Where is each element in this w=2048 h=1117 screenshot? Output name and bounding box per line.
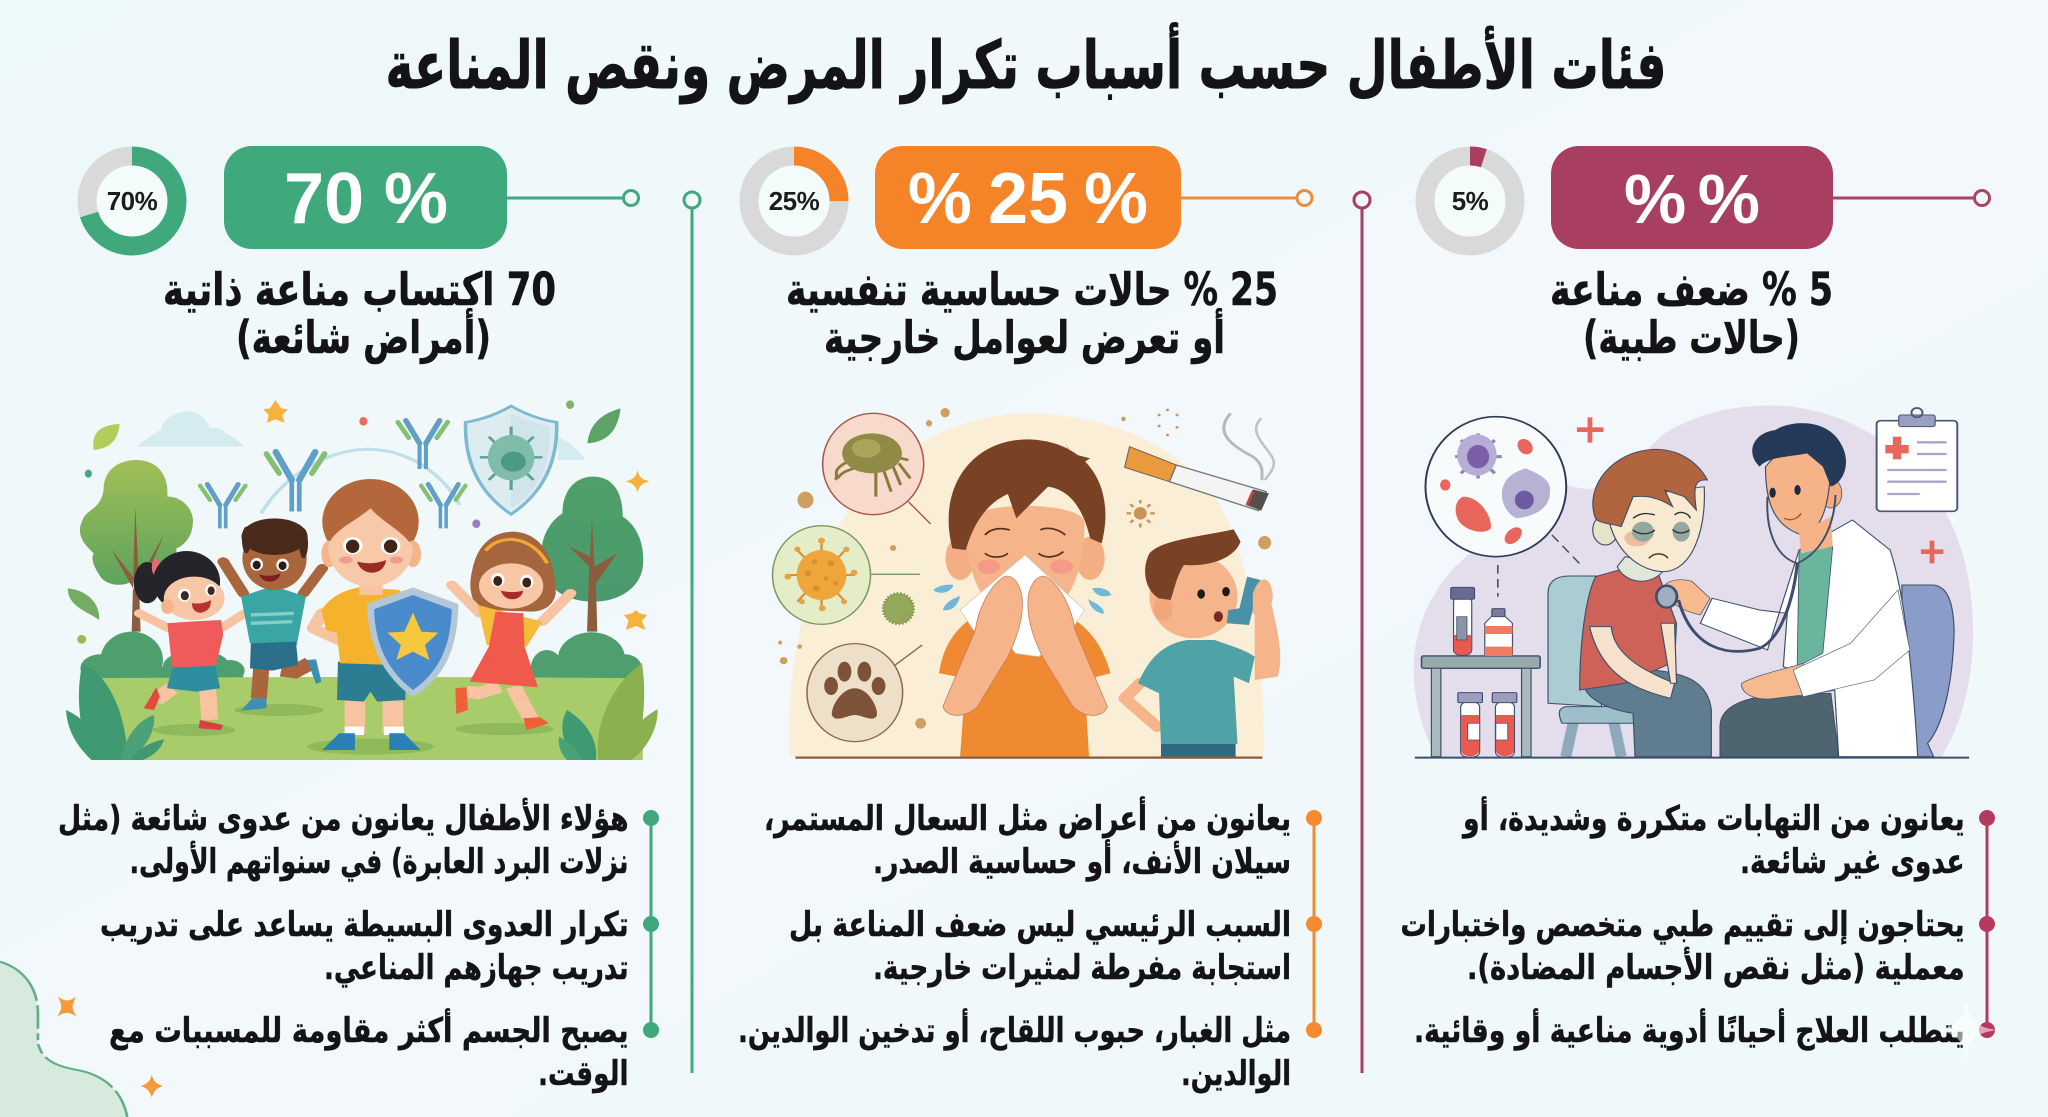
text block: هؤلاء الأطفال يعانون من عدوى شائعة (مثل: [58, 797, 629, 839]
panel: respiratory allergy 25%: [738, 146, 1370, 1094]
antibodies: [200, 421, 465, 528]
bushes: [80, 632, 642, 688]
donut chart 70%: [87, 156, 177, 246]
grass: [87, 677, 643, 760]
sneezing boy: [933, 439, 1111, 757]
blood cell magnifier: [1425, 417, 1581, 597]
percentage pill 25: % 25 %: [908, 159, 1148, 239]
donut chart 5%: [1425, 156, 1515, 246]
illustration: happy children with shields: [66, 400, 658, 760]
stethoscope: [1656, 495, 1836, 651]
percentage pill: [1551, 146, 1833, 249]
percentage pill: % %: [1624, 160, 1760, 238]
child: big boy with shield: [313, 479, 458, 750]
percentage pill 70: 70 %: [284, 159, 448, 239]
text block: تكرار العدوى البسيطة يساعد على تدريب: [100, 905, 629, 945]
text block: الوالدين.: [1181, 1054, 1291, 1094]
pollen: [883, 593, 914, 624]
vertical divider: [1354, 192, 1370, 1073]
bullet timeline: [1306, 810, 1322, 1038]
virus shield: [466, 406, 557, 514]
doctor: [1663, 423, 1918, 757]
donut chart 25%: 25%: [769, 186, 820, 216]
sick boy: [1580, 449, 1711, 757]
arc: [261, 449, 460, 513]
text block: استجابة مفرطة لمثيرات خارجية.: [873, 948, 1291, 988]
virus circle: [773, 526, 920, 624]
heading: [786, 263, 1278, 364]
donut chart 25%: [749, 156, 839, 246]
mite circle: [823, 413, 931, 524]
percentage pill 70: [224, 146, 507, 249]
panel: acquired immunity 70%: [58, 146, 700, 1094]
cream arch: [789, 413, 1264, 757]
heading: 25 % حالات حساسية تنفسية: [786, 263, 1278, 316]
text block: عدوى غير شائعة.: [1740, 842, 1965, 882]
child: girl in red shirt: [134, 551, 250, 730]
text block: نزلات البرد العابرة) في سنواتهم الأولى.: [130, 840, 628, 882]
percentage pill 25: [875, 146, 1181, 249]
heading: [1550, 263, 1833, 364]
right tree: [541, 477, 643, 602]
clipboard: [1877, 408, 1957, 511]
text block: سيلان الأنف، أو حساسية الصدر.: [873, 839, 1291, 882]
heading: 70 اكتساب مناعة ذاتية: [163, 263, 556, 316]
illustration: allergy triggers, sneezing boy and inhaler: [773, 408, 1280, 758]
heading: أو تعرض لعوامل خارجية: [824, 308, 1225, 364]
lavender background: [1414, 406, 1973, 757]
text block: الوقت.: [538, 1054, 629, 1094]
paw circle: [807, 644, 922, 742]
decorative corner blob: [0, 962, 163, 1117]
floor line: [795, 754, 1262, 761]
plus signs: [1577, 417, 1943, 563]
connector: [507, 190, 638, 206]
text block: [738, 796, 1291, 1094]
illustration: doctor examining child: [1414, 406, 1973, 758]
heading: [163, 263, 556, 364]
table with tubes and bottle: [1422, 587, 1540, 757]
vertical divider: [684, 192, 700, 1073]
heading: 5 % ضعف مناعة: [1550, 263, 1833, 316]
heading: (أمراض شائعة): [236, 308, 491, 364]
small decorations: stars, leaves and dots: [68, 400, 650, 644]
panel: weak immunity 5%: [1400, 146, 1997, 1060]
text block: يعانون من أعراض مثل السعال المستمر،: [764, 796, 1291, 839]
bullet timeline: [643, 810, 659, 1038]
child: girl in red dress: [452, 532, 570, 730]
donut chart 70%: 70%: [107, 186, 158, 216]
text block: يصبح الجسم أكثر مقاومة للمسببات مع: [109, 1008, 629, 1051]
floating dust: [778, 408, 1271, 729]
connector: [1181, 190, 1312, 206]
patient chair: [1548, 576, 1681, 757]
donut chart 5%: 5%: [1452, 186, 1489, 216]
bullet timeline: [1979, 810, 1995, 1038]
connector: [1833, 190, 1990, 206]
left tree: [80, 460, 193, 585]
text block: تدريب جهازهم المناعي.: [324, 948, 629, 988]
sparkle: [1935, 1000, 1997, 1060]
foreground leaves: [66, 663, 658, 760]
text block: مثل الغبار، حبوب اللقاح، أو تدخين الوالدين.: [738, 1008, 1291, 1051]
text block: [1400, 796, 1965, 1051]
cloud: [136, 412, 244, 447]
doctor chair: [1902, 585, 1954, 757]
text block: السبب الرئيسي ليس ضعف المناعة بل: [789, 905, 1291, 945]
text block: [58, 797, 629, 1094]
floor line: [1415, 755, 1969, 761]
cigarette and smoke: [1125, 413, 1274, 511]
child: boy in teal shirt: [223, 518, 322, 711]
boy with inhaler: [1125, 529, 1280, 757]
heading: (حالات طبية): [1583, 311, 1800, 364]
